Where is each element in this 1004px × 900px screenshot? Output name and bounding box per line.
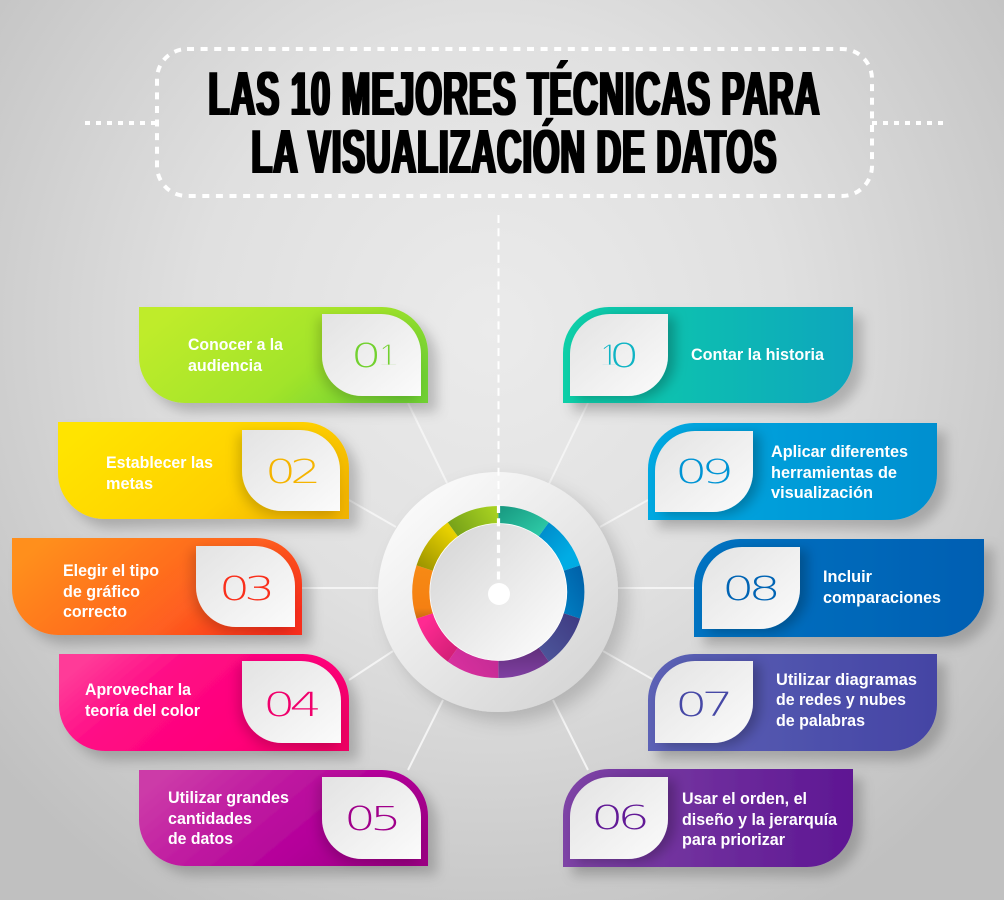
card 01: audiencia <box>188 357 263 375</box>
card 05 <box>139 770 428 866</box>
number 10 <box>602 342 635 368</box>
color ring <box>412 506 584 678</box>
title <box>208 60 820 187</box>
card 07: de palabras <box>776 712 865 730</box>
card 07: de redes y nubes <box>776 691 906 709</box>
card 03: Elegir el tipo <box>63 562 159 580</box>
card 03 <box>12 538 302 635</box>
card 01 <box>139 307 428 403</box>
card 04: Aprovechar la <box>85 681 192 699</box>
title frame: dashed rounded box <box>85 49 944 196</box>
card 04: teoría del color <box>85 702 201 720</box>
card 08: Incluir <box>823 568 873 586</box>
card 06: Usar el orden, el <box>682 790 807 808</box>
card 09: visualización <box>771 484 873 502</box>
number 01 <box>355 342 396 368</box>
card 08 <box>694 539 984 637</box>
card 02: Establecer las <box>106 454 213 472</box>
card 02: 02 <box>265 452 317 491</box>
card 05: Utilizar grandes <box>168 789 289 807</box>
card 03: correcto <box>63 603 127 621</box>
card 05: de datos <box>168 830 233 848</box>
card 09: herramientas de <box>771 464 897 482</box>
card 10 <box>563 307 853 403</box>
center dot <box>488 583 510 605</box>
card 06: 06 <box>591 799 646 837</box>
number 01: 0 <box>351 336 378 375</box>
card 05: 05 <box>344 800 397 839</box>
card 10: Contar la historia <box>691 346 825 364</box>
card 03: 03 <box>219 569 271 608</box>
card 02: metas <box>106 475 153 493</box>
inner disc <box>430 524 567 660</box>
card 03: de gráfico <box>63 583 140 601</box>
center wheel <box>378 472 618 712</box>
card 07: Utilizar diagramas <box>776 671 917 689</box>
connector lines <box>302 403 694 770</box>
number 10: 1 <box>600 337 618 374</box>
card 06 <box>563 769 853 867</box>
card 08: 08 <box>722 570 777 608</box>
card 07 <box>648 654 937 751</box>
vertical dashed connector <box>498 215 500 590</box>
card 09 <box>648 423 937 520</box>
card 06: para priorizar <box>682 831 786 849</box>
card 06: diseño y la jerarquía <box>682 811 838 829</box>
card 02 <box>58 422 349 519</box>
number 10: 0 <box>609 336 636 375</box>
card 07: 07 <box>675 686 729 724</box>
number 01: 1 <box>379 337 397 374</box>
card 04 <box>59 654 349 751</box>
outer disc <box>378 472 618 712</box>
card 04: 04 <box>263 686 318 724</box>
card 08: comparaciones <box>823 589 941 607</box>
card 01: Conocer a la <box>188 336 284 354</box>
card 05: cantidades <box>168 810 252 828</box>
card 09: Aplicar diferentes <box>771 443 908 461</box>
card 09: 09 <box>675 453 730 491</box>
